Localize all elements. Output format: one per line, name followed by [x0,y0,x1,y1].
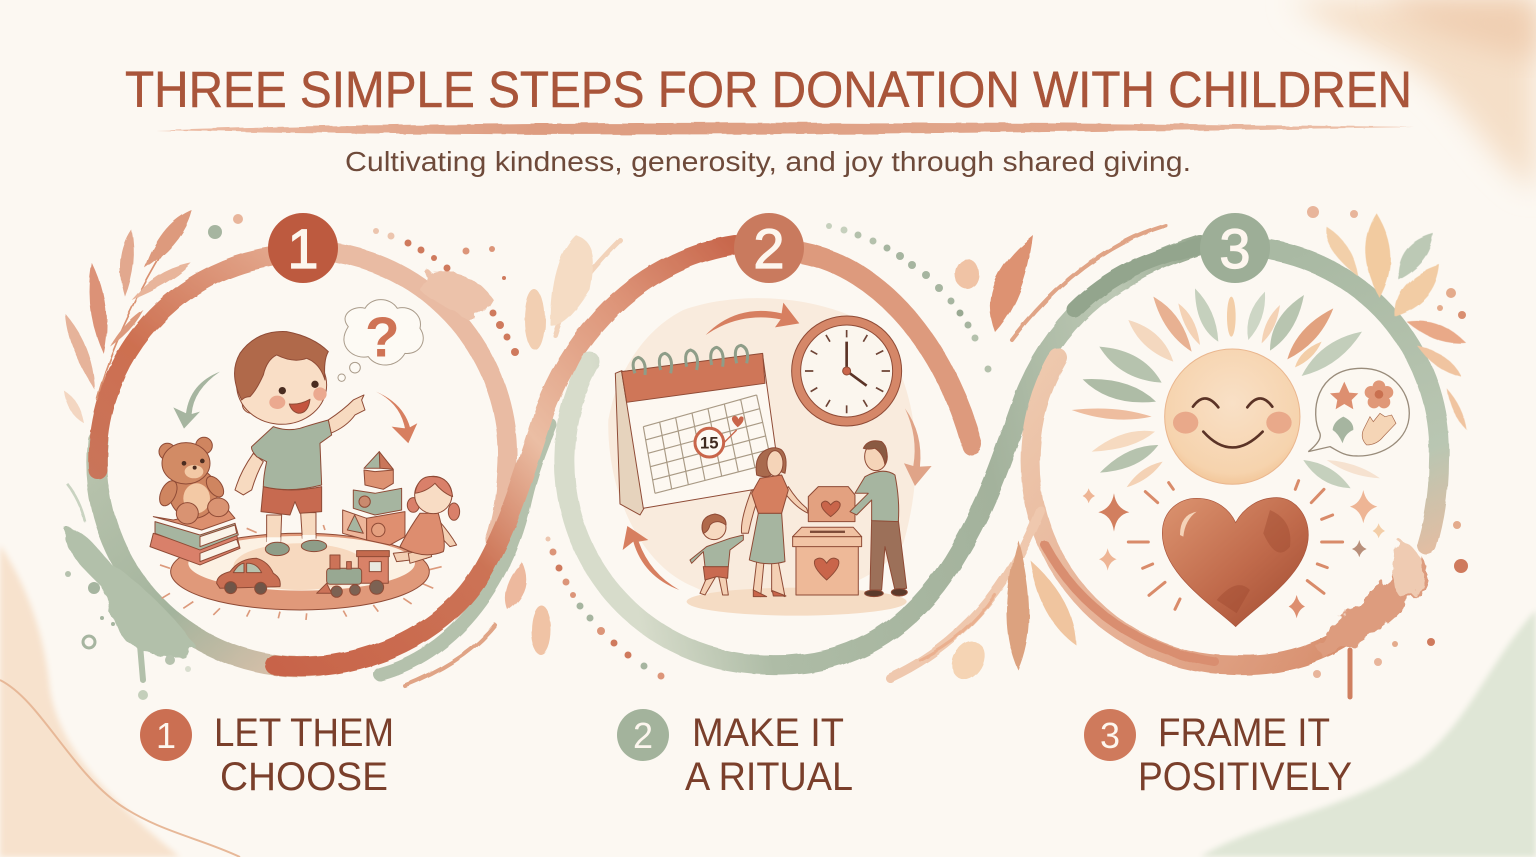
toy blocks [343,452,405,545]
peach wash [608,298,916,601]
heart [1162,498,1308,627]
doll [393,476,460,563]
books and teddy bear [150,437,240,565]
step 2 illustration: family ritual [608,298,932,616]
donation boxes [793,487,862,595]
botanical leaves [63,210,1467,684]
watercolor drips [140,645,1350,697]
label: make it a ritual: A RITUAL [685,755,853,799]
parent figure: woman [741,448,808,597]
subtitle: Cultivating kindness, generosity, and joy through shared giving. [345,146,1191,177]
label: frame it positively: 3 [1100,715,1120,756]
speech bubble with kind symbols [1308,368,1409,456]
step badge 1 [268,213,338,283]
ground shadow [687,588,907,616]
label: let them choose: CHOOSE [220,755,388,799]
label: frame it positively [1084,709,1352,799]
leaves: between steps [506,235,1076,684]
arrow: salmon [376,392,417,443]
clock [792,316,902,426]
sparkles and rays around heart [1083,481,1385,618]
label: make it a ritual [617,709,853,799]
label: let them choose: LET THEM [214,711,394,755]
leaves: left of step 1 [63,210,192,522]
toy train [317,551,389,597]
rug [160,525,442,620]
calendar: 15 [700,434,719,453]
parent figure: man [850,441,907,597]
label: make it a ritual: 2 [633,715,653,756]
thought bubble: ? [365,307,400,370]
label: let them choose: 1 [156,715,176,756]
toy car [217,558,280,594]
arrow: sage [173,372,220,429]
connected rings [97,225,1439,686]
sun face [1165,349,1300,484]
step badge 3: 3 [1219,217,1251,280]
decorative dots [65,206,1468,700]
step badge 2: 2 [753,217,785,280]
label: frame it positively: FRAME IT [1158,711,1330,755]
child figure [690,514,743,595]
ring 3 [1030,246,1439,665]
cycle arrows [623,303,932,590]
leaves: right of step 3 [1326,213,1467,430]
sun rays [1072,288,1380,488]
ribbon from ring 1 to ring 2 [275,245,735,674]
title brush underline [155,123,1415,134]
label: make it a ritual: MAKE IT [692,711,844,755]
title: THREE SIMPLE STEPS FOR DONATION WITH CHILDREN [125,61,1412,118]
child pointing [235,332,365,556]
step badge 1: 1 [287,217,319,280]
watercolor stains [65,271,1427,658]
thin swooshes [405,225,1165,686]
label: let them choose [140,709,394,799]
calendar [615,345,781,515]
step 1 illustration: child choosing toys [150,300,460,620]
step badge 2 [734,213,804,283]
label: frame it positively: POSITIVELY [1138,755,1352,799]
thought bubble [338,300,423,381]
ring 2 and ribbon to ring 3 [564,245,1200,665]
step badge 3 [1200,213,1270,283]
ring 1 [97,253,508,667]
step 3 illustration: smiling sun and heart [1072,288,1409,627]
